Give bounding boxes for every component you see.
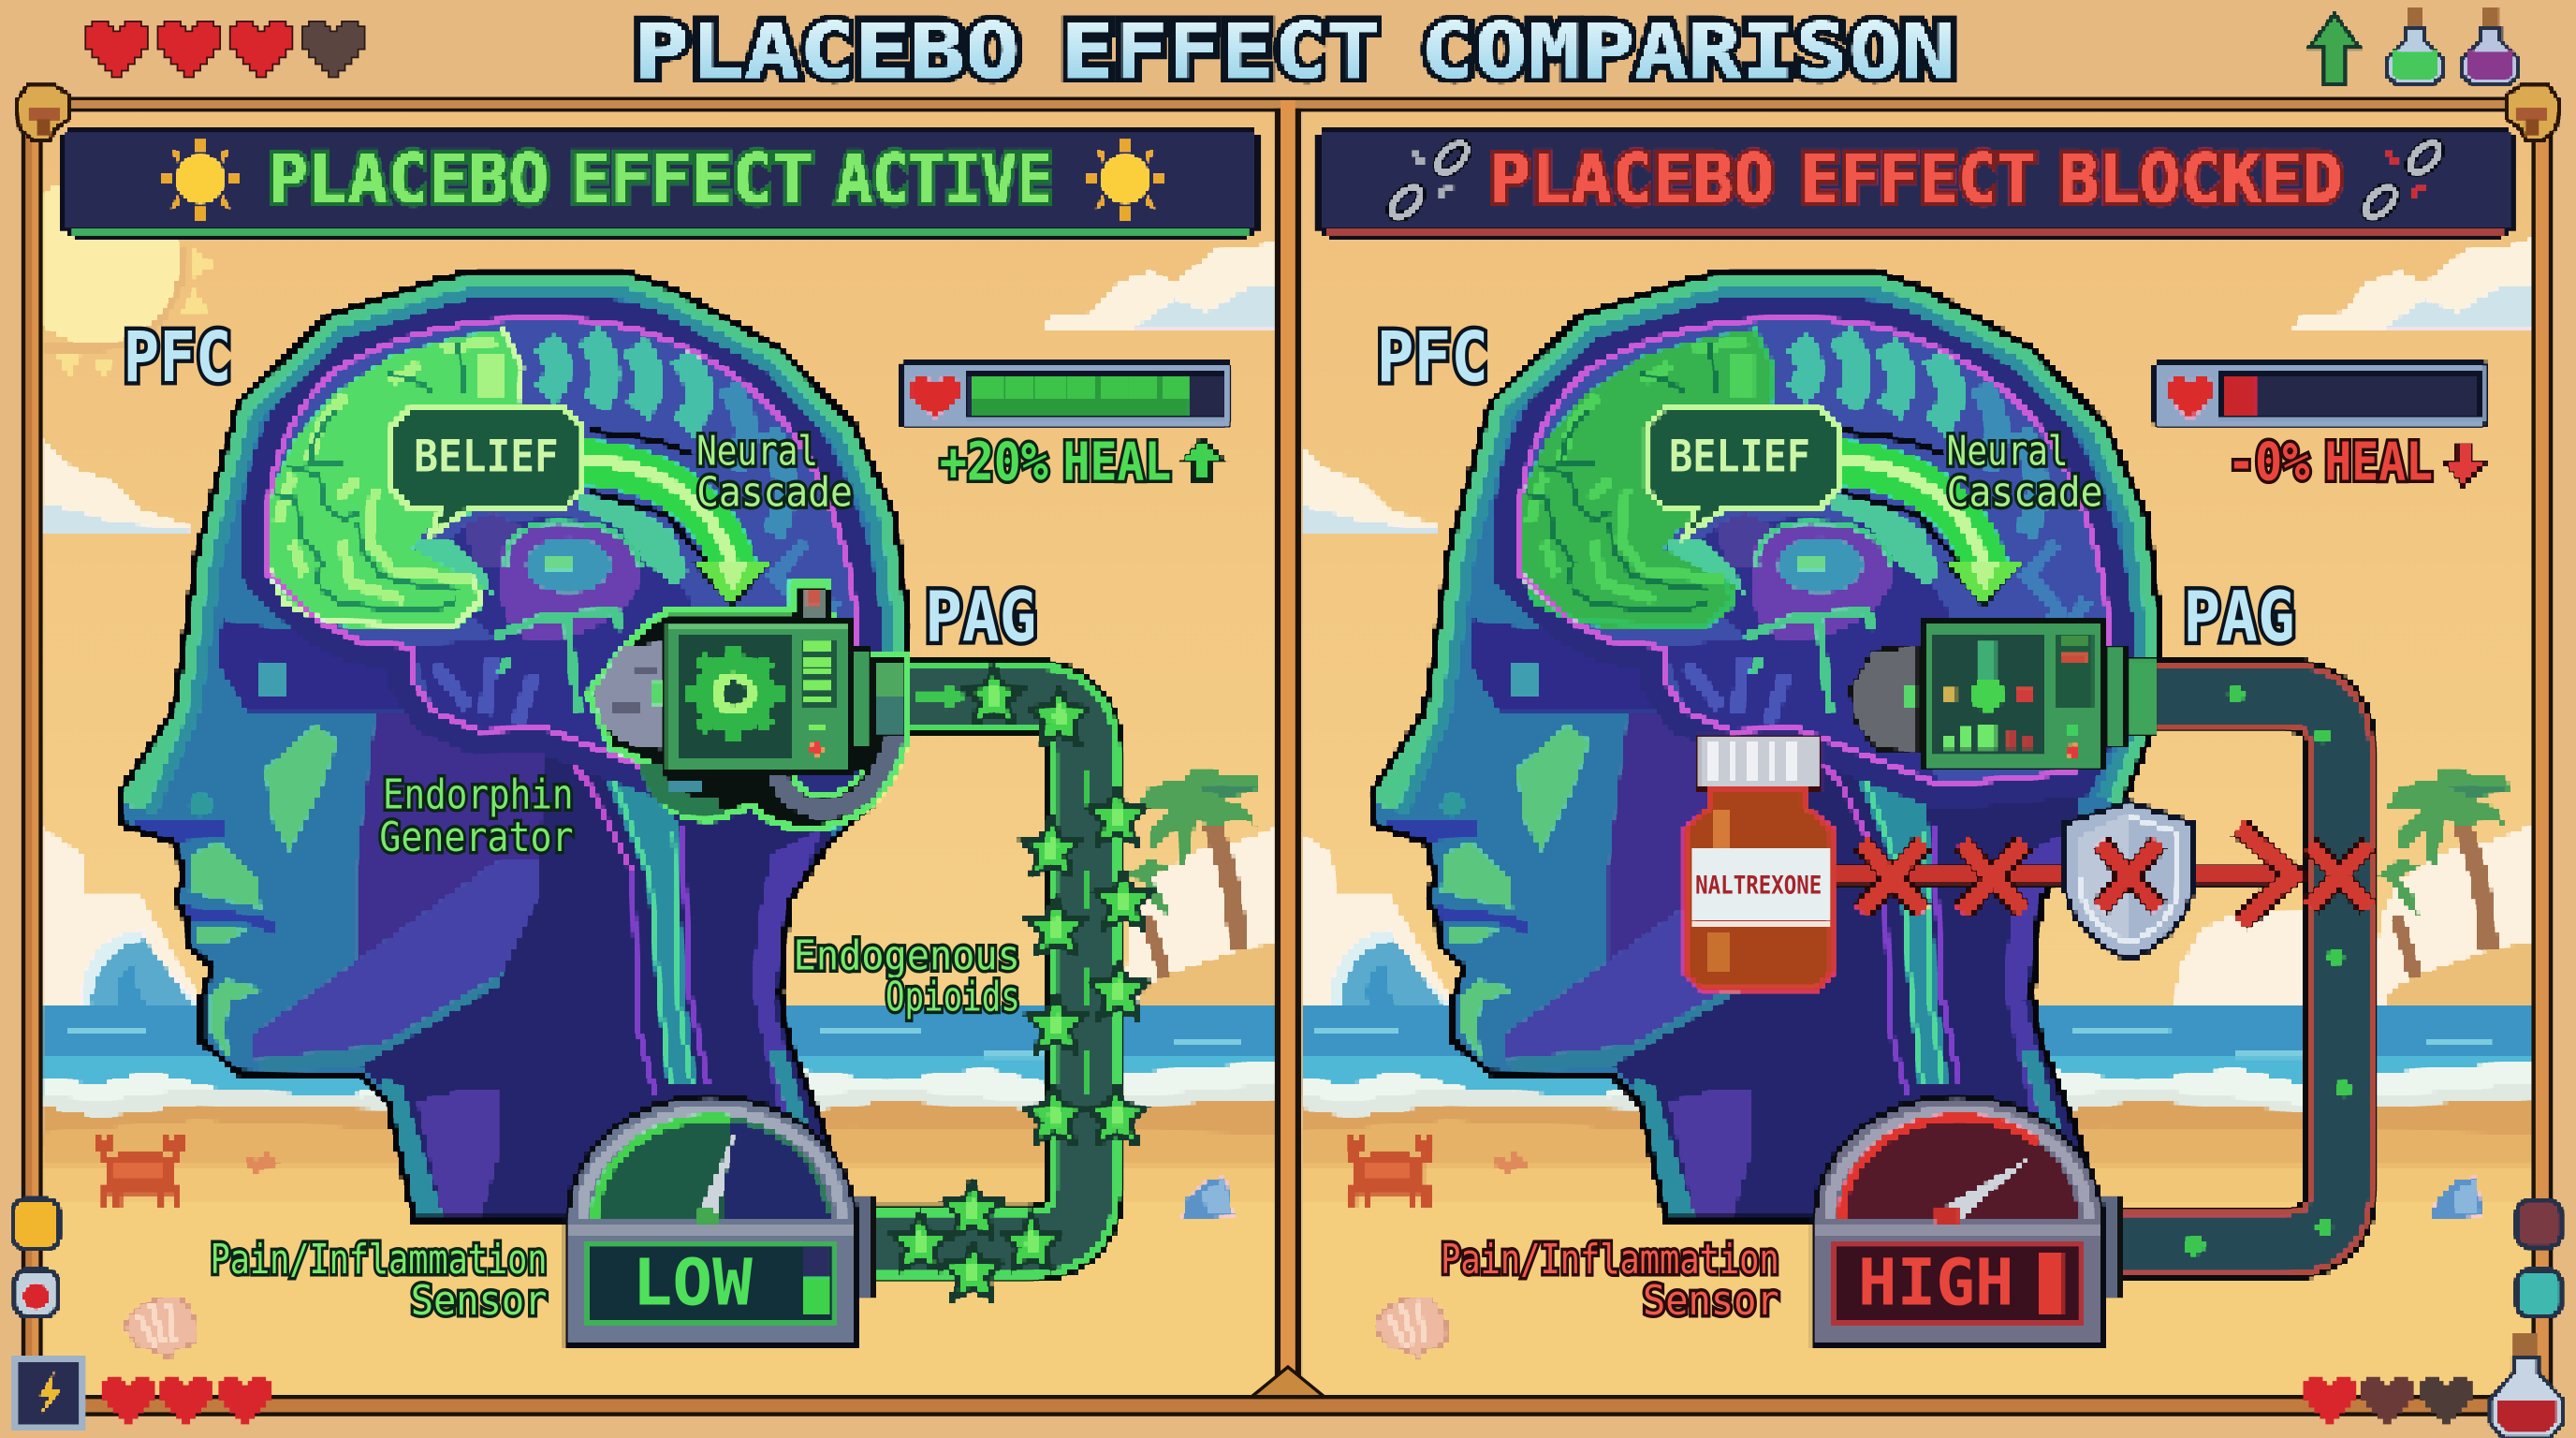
icon: large red potion (2491, 1334, 2563, 1438)
title: EFFECT (1061, 7, 1380, 95)
icon: purple potion (2463, 8, 2518, 84)
label: neural cascade: Neural (696, 428, 818, 476)
heal readout (940, 432, 1171, 492)
icon: sun left (161, 139, 240, 220)
icon: sun right (1086, 139, 1164, 220)
icon: broken chain right (2361, 138, 2444, 222)
label: endorphin generator: Generator (379, 814, 573, 861)
heal readout: HEAL (2324, 432, 2433, 492)
bottle label text: NALTREXONE (1695, 873, 1822, 901)
label: pain sensor: Pain/Inflammation (211, 1236, 547, 1284)
banner title: ACTIVE (836, 139, 1053, 218)
label: belief: BELIEF (414, 432, 559, 483)
health bar: +20% (900, 363, 1230, 427)
label: endogenous opioids: Endogenous (794, 932, 1020, 979)
title (634, 7, 1954, 95)
label: neural cascade: Neural (1947, 428, 2069, 476)
panel: placebo effect blocked (1283, 109, 2548, 1410)
beach scene background (11, 109, 1297, 1410)
label: pain sensor: Sensor (1643, 1277, 1779, 1325)
icon: down arrow (2443, 444, 2485, 486)
belief speech bubble (391, 407, 583, 536)
label: pain sensor (1441, 1236, 1779, 1325)
icon: shield with x (2065, 801, 2193, 960)
label: endorphin generator: Endorphin (383, 770, 573, 818)
label: endogenous opioids (794, 932, 1020, 1020)
label: endorphin generator (379, 770, 573, 861)
label: PAG: PAG (925, 578, 1036, 657)
label: pain sensor: Sensor (411, 1277, 547, 1325)
endorphin generator device: dim (1850, 620, 2157, 769)
label: neural cascade (1947, 428, 2102, 517)
blocked pipeline (2111, 687, 2350, 1255)
banner title: PLACEBO (1490, 139, 1774, 218)
gauge reading: low: LOW (633, 1245, 754, 1320)
label: PFC: PFC (1377, 318, 1488, 398)
label: neural cascade: Cascade (696, 469, 853, 517)
inhibition beam with x marks (1832, 827, 2369, 923)
hud: top-left hearts (85, 22, 365, 77)
icon: up arrow (1181, 439, 1223, 481)
neural cascade arrow (1827, 431, 2024, 607)
head with brain: active (120, 271, 909, 1249)
beach scene background (1283, 109, 2548, 1410)
banner title (268, 139, 1053, 218)
head with brain: blocked (1371, 271, 2160, 1249)
banner title: EFFECT (1800, 139, 2037, 218)
label: belief: BELIEF (1669, 432, 1810, 483)
heal readout (2228, 432, 2433, 492)
hud: bottom-left hearts (102, 1377, 271, 1424)
icon: green potion (2387, 8, 2443, 84)
panel artwork: active (11, 109, 1297, 1410)
naltrexone bottle (1686, 736, 1832, 990)
opioid pipeline with stars (862, 666, 1153, 1299)
heal readout: -0% (2228, 432, 2310, 492)
hud: bottom-right hearts (2304, 1377, 2473, 1424)
banner: placebo effect active (61, 128, 1260, 240)
panel: placebo effect active (11, 109, 1297, 1410)
neon outline (588, 583, 907, 829)
label: pain sensor (211, 1236, 547, 1325)
banner title: EFFECT (570, 139, 813, 218)
pain sensor gauge: high (1814, 1096, 2121, 1344)
panel artwork: blocked (1283, 109, 2548, 1410)
banner: placebo effect blocked (1316, 128, 2515, 240)
label: PAG: PAG (2183, 578, 2295, 657)
icon: lightning box (15, 1358, 82, 1428)
icon: broken chain left (1386, 138, 1472, 222)
label: PFC: PFC (124, 318, 231, 398)
endorphin generator device (588, 583, 907, 829)
icon: coin (13, 1199, 59, 1249)
banner title: PLACEBO (268, 139, 549, 218)
icon: green arrow (2310, 15, 2359, 84)
icon: dark gem (2517, 1201, 2561, 1247)
hud: top-right items (2310, 8, 2518, 84)
icon: teal gem (2517, 1270, 2561, 1316)
pain sensor gauge: low (566, 1096, 874, 1344)
icon: red potion gem (15, 1270, 57, 1316)
heal readout: HEAL (1062, 432, 1171, 492)
icon: sun (43, 185, 213, 376)
title: COMPARISON (1421, 7, 1954, 95)
icon: skull right (2507, 85, 2559, 139)
banner title (1490, 139, 2343, 218)
health bar: empty (2156, 363, 2487, 427)
title: PLACEBO (634, 7, 1020, 95)
icon: skull left (17, 85, 69, 139)
banner title: BLOCKED (2058, 139, 2343, 218)
gauge reading: high: HIGH (1858, 1245, 2014, 1320)
neural cascade arrow (575, 431, 772, 607)
belief speech bubble (1647, 407, 1838, 536)
label: pain sensor: Pain/Inflammation (1441, 1236, 1779, 1284)
panel labels: blocked (1377, 318, 2433, 1325)
heal readout: +20% (940, 432, 1048, 492)
label: neural cascade: Cascade (1947, 469, 2102, 517)
label: endogenous opioids: Opioids (886, 973, 1020, 1020)
panel labels: active (124, 318, 1171, 1325)
label: neural cascade (696, 428, 853, 517)
